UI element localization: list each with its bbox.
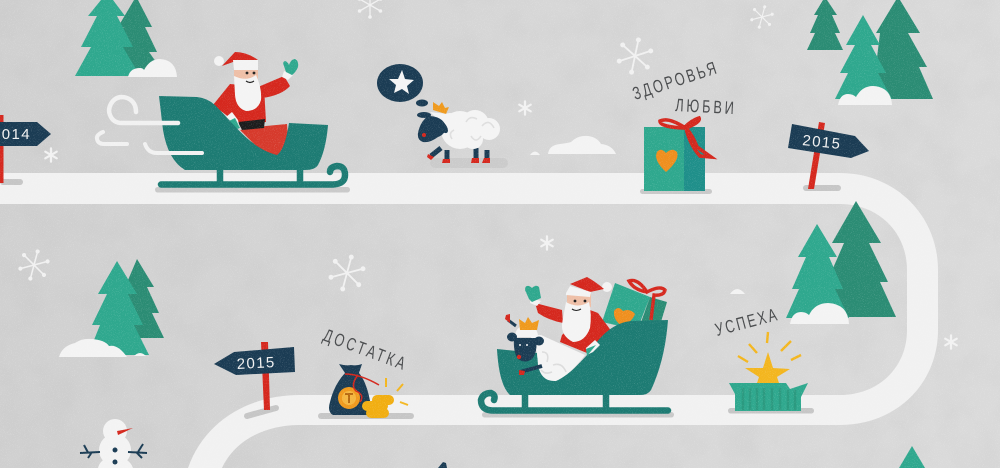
road sign: 2014 <box>0 115 51 185</box>
snow drift clouds <box>530 136 745 294</box>
second sleigh with Santa, sheep and gift <box>481 277 674 418</box>
shadow <box>482 412 674 418</box>
word: любви: ЛЮБВИ <box>675 96 734 119</box>
winding white road <box>0 173 938 468</box>
snow pile <box>128 59 177 77</box>
trees: lower right group <box>786 201 896 324</box>
road sign: 2015 left <box>214 342 295 416</box>
rays <box>738 332 801 362</box>
coins <box>362 395 394 418</box>
road sign: 2015 left: 2015 <box>236 354 276 373</box>
sleigh body <box>159 96 328 170</box>
snow pile <box>838 86 892 105</box>
tuft on head <box>430 112 450 124</box>
road sign: 2015 right <box>788 122 869 191</box>
runners <box>161 166 345 184</box>
word: достатка: ДОСТАТКА <box>320 326 408 374</box>
money bag with coins <box>318 364 414 419</box>
santa <box>525 277 612 353</box>
sheep <box>505 314 585 381</box>
head <box>514 338 536 362</box>
snow pile <box>59 339 127 357</box>
word: здоровья: ЗДОРОВЬЯ <box>630 59 719 104</box>
sleigh with Santa <box>155 52 350 192</box>
snow pile <box>790 303 849 324</box>
gift box with heart <box>640 118 712 194</box>
rays <box>386 378 408 405</box>
sleigh body <box>497 320 668 395</box>
coin emblem <box>338 387 360 409</box>
shadow <box>430 158 508 168</box>
ribbon <box>345 374 379 402</box>
santa <box>213 52 298 156</box>
trees: lower left group <box>59 259 164 357</box>
sheep with thought bubble <box>377 64 508 168</box>
gift in sleigh <box>602 280 667 330</box>
star <box>745 352 790 386</box>
snowman <box>80 419 147 468</box>
box <box>729 383 808 411</box>
trees: top right group <box>807 0 933 105</box>
head <box>418 116 446 142</box>
trees: top left group <box>75 0 177 77</box>
fleece body <box>439 110 500 149</box>
sleigh shadow <box>155 187 350 192</box>
runners <box>481 393 668 410</box>
open box with star <box>728 332 814 414</box>
bottom tree tip <box>899 446 925 468</box>
mitten on sleigh <box>586 340 600 355</box>
raised mitten <box>282 71 293 80</box>
legs <box>431 148 487 160</box>
bag <box>329 364 372 415</box>
road sign: 2015 right: 2015 <box>802 132 842 153</box>
crown <box>433 102 449 114</box>
bottom dark shape <box>438 462 447 468</box>
word: успеха: УСПЕХА <box>713 305 779 340</box>
wind lines <box>97 97 202 153</box>
snowflakes and small stars <box>16 0 957 349</box>
thought bubble <box>377 64 428 106</box>
tuft <box>515 325 538 337</box>
